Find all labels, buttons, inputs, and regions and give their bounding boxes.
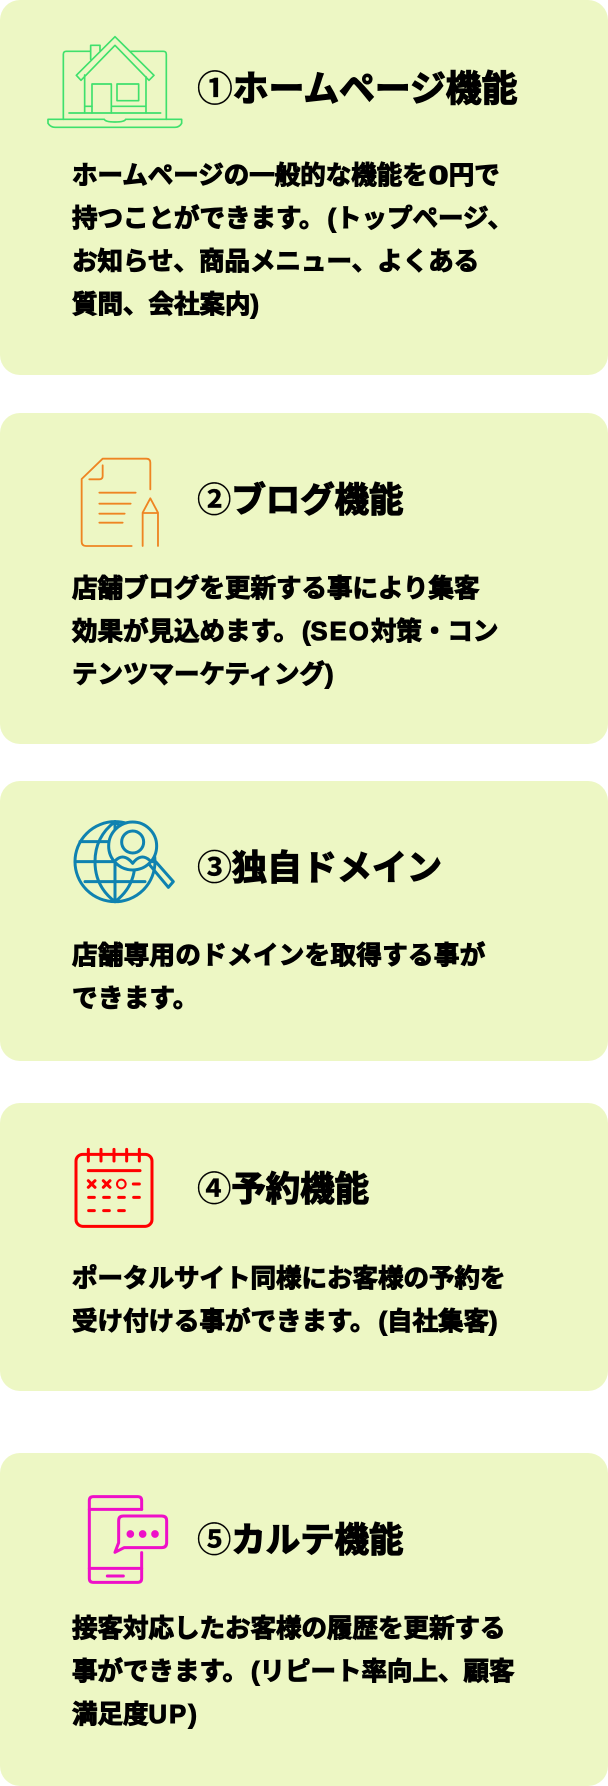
panel: records feature bbox=[0, 1453, 608, 1786]
body text: お知らせ、商品メニュー、よくある bbox=[72, 248, 479, 276]
heading: ⑤カルテ機能 bbox=[197, 1522, 403, 1560]
body text: 満足度UP) bbox=[72, 1701, 197, 1729]
body text: 持つことができます。(トップページ、 bbox=[72, 205, 513, 233]
body text: ポータルサイト同様にお客様の予約を bbox=[72, 1265, 506, 1293]
body text: 受け付ける事ができます。(自社集客) bbox=[72, 1308, 497, 1336]
body text bbox=[72, 1614, 515, 1729]
body text: テンツマーケティング) bbox=[72, 661, 333, 689]
body text: できます。 bbox=[72, 984, 199, 1012]
body text bbox=[72, 574, 498, 689]
body text: 店舗専用のドメインを取得する事が bbox=[72, 942, 486, 970]
body text: 質問、会社案内) bbox=[72, 291, 259, 319]
icon: calendar bbox=[74, 1148, 154, 1228]
icon: globe with magnifier bbox=[74, 820, 175, 904]
body text: ホームページの一般的な機能を 円で bbox=[72, 162, 500, 190]
panel: homepage feature bbox=[0, 0, 608, 375]
heading: ②ブログ機能 bbox=[197, 482, 403, 520]
body text: 店舗ブログを更新する事により集客 bbox=[72, 575, 480, 603]
body text bbox=[72, 941, 486, 1012]
body text bbox=[72, 1264, 506, 1336]
heading: ①ホームページ機能 bbox=[197, 69, 517, 109]
panel: reservation feature bbox=[0, 1103, 608, 1391]
body text: 効果が見込めます。(SEO対策・コン bbox=[72, 618, 498, 646]
heading: ④予約機能 bbox=[197, 1171, 369, 1209]
body text bbox=[72, 161, 513, 319]
icon: document and pencil bbox=[80, 458, 159, 547]
body text: 0 bbox=[428, 162, 448, 190]
body text: 接客対応したお客様の履歴を更新する bbox=[72, 1615, 506, 1643]
body text: 事ができます。(リピート率向上、顧客 bbox=[72, 1658, 514, 1686]
heading: ③独自ドメイン bbox=[197, 849, 442, 888]
panel: domain feature bbox=[0, 781, 608, 1061]
icon: house on laptop bbox=[47, 36, 182, 128]
panel: blog feature bbox=[0, 413, 608, 744]
